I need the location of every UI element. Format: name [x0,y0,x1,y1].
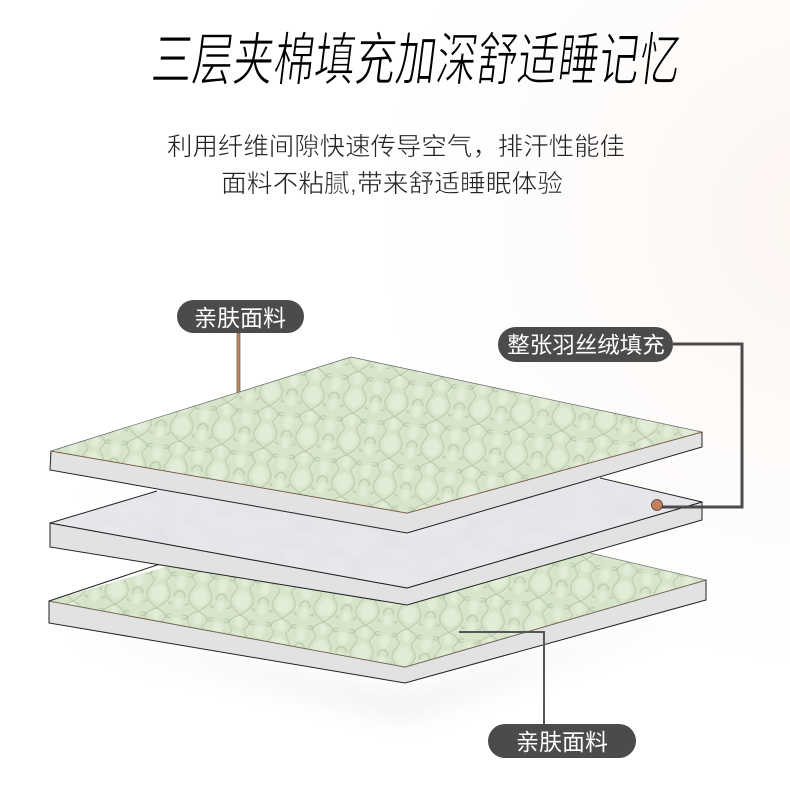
label: down filling [498,327,673,362]
connector line: down filling [660,344,742,507]
label: bottom fabric: 亲肤面料 [516,729,608,755]
description text [167,133,625,198]
label: down filling: 整张羽丝绒填充 [507,333,665,358]
layer: bottom skin-friendly fabric [49,504,706,683]
layer: middle down filling [50,428,702,605]
label: top fabric [177,300,304,333]
title: 三层夹棉填充加深舒适睡记忆 [148,28,684,93]
description text: 利用纤维间隙快速传导空气，排汗性能佳 [167,133,625,161]
description text: 面料不粘腻,带来舒适睡眠体验 [221,170,563,198]
label: bottom fabric [488,724,636,758]
connector line: top fabric label [237,333,240,395]
marker dot: down filling [652,500,662,510]
soft shadows beneath the layers [60,460,700,715]
label: top fabric: 亲肤面料 [194,305,286,331]
layer: top skin-friendly fabric [50,357,702,533]
connector line: bottom fabric label [459,632,544,724]
